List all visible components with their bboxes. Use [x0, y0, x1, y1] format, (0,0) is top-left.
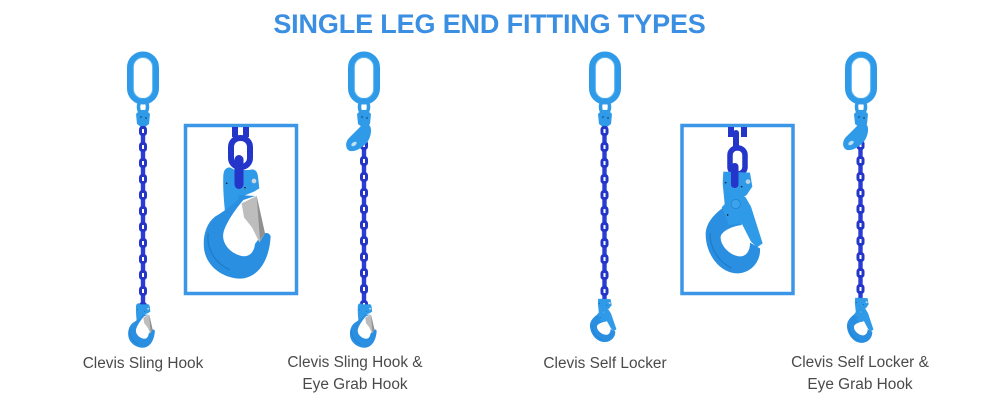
hook: [128, 303, 155, 348]
sling 3: clevis self locker: [590, 54, 618, 342]
inset box: self locker close-up: [682, 126, 793, 294]
eye grab hook: [346, 124, 371, 151]
label: clevis sling hook and eye grab hook: Eye Grab Hook: [302, 376, 408, 393]
label: clevis self locker: Clevis Self Locker: [543, 355, 667, 372]
label: clevis self locker and eye grab hook: Eye Grab Hook: [807, 376, 913, 393]
sling 2: clevis sling hook and eye grab hook: [346, 54, 377, 348]
master link: [130, 54, 156, 102]
inset box: sling hook close-up: [186, 126, 296, 294]
sling 4: clevis self locker and eye grab hook: [843, 54, 874, 343]
link over clevis: [234, 155, 244, 189]
chain: [359, 140, 369, 306]
title: SINGLE LEG END FITTING TYPES: [273, 9, 706, 39]
box frame: [186, 126, 296, 294]
sling 1: clevis sling hook: [128, 54, 156, 348]
close-up upper chain links: [231, 127, 250, 167]
chain: [856, 140, 866, 300]
label: clevis sling hook: Clevis Sling Hook: [83, 355, 204, 372]
hook: [847, 298, 873, 343]
connector: [854, 100, 868, 127]
label: clevis sling hook and eye grab hook: Clevis Sling Hook &: [287, 354, 423, 371]
eye grab hook: [843, 123, 868, 150]
master link: [848, 54, 874, 102]
link over clevis: [731, 163, 738, 188]
close-up upper chain links: [728, 127, 747, 174]
hook: [350, 303, 377, 348]
close-up hook: [204, 167, 271, 279]
connector: [598, 100, 612, 127]
connector: [357, 100, 371, 127]
chain: [600, 126, 610, 301]
master link: [351, 54, 377, 102]
close-up hook: [706, 172, 763, 273]
box frame: [682, 126, 793, 294]
chain: [138, 126, 148, 306]
master link: [592, 54, 618, 102]
label: clevis self locker and eye grab hook: Clevis Self Locker &: [791, 354, 930, 371]
connector: [136, 100, 150, 127]
hook: [590, 299, 616, 342]
